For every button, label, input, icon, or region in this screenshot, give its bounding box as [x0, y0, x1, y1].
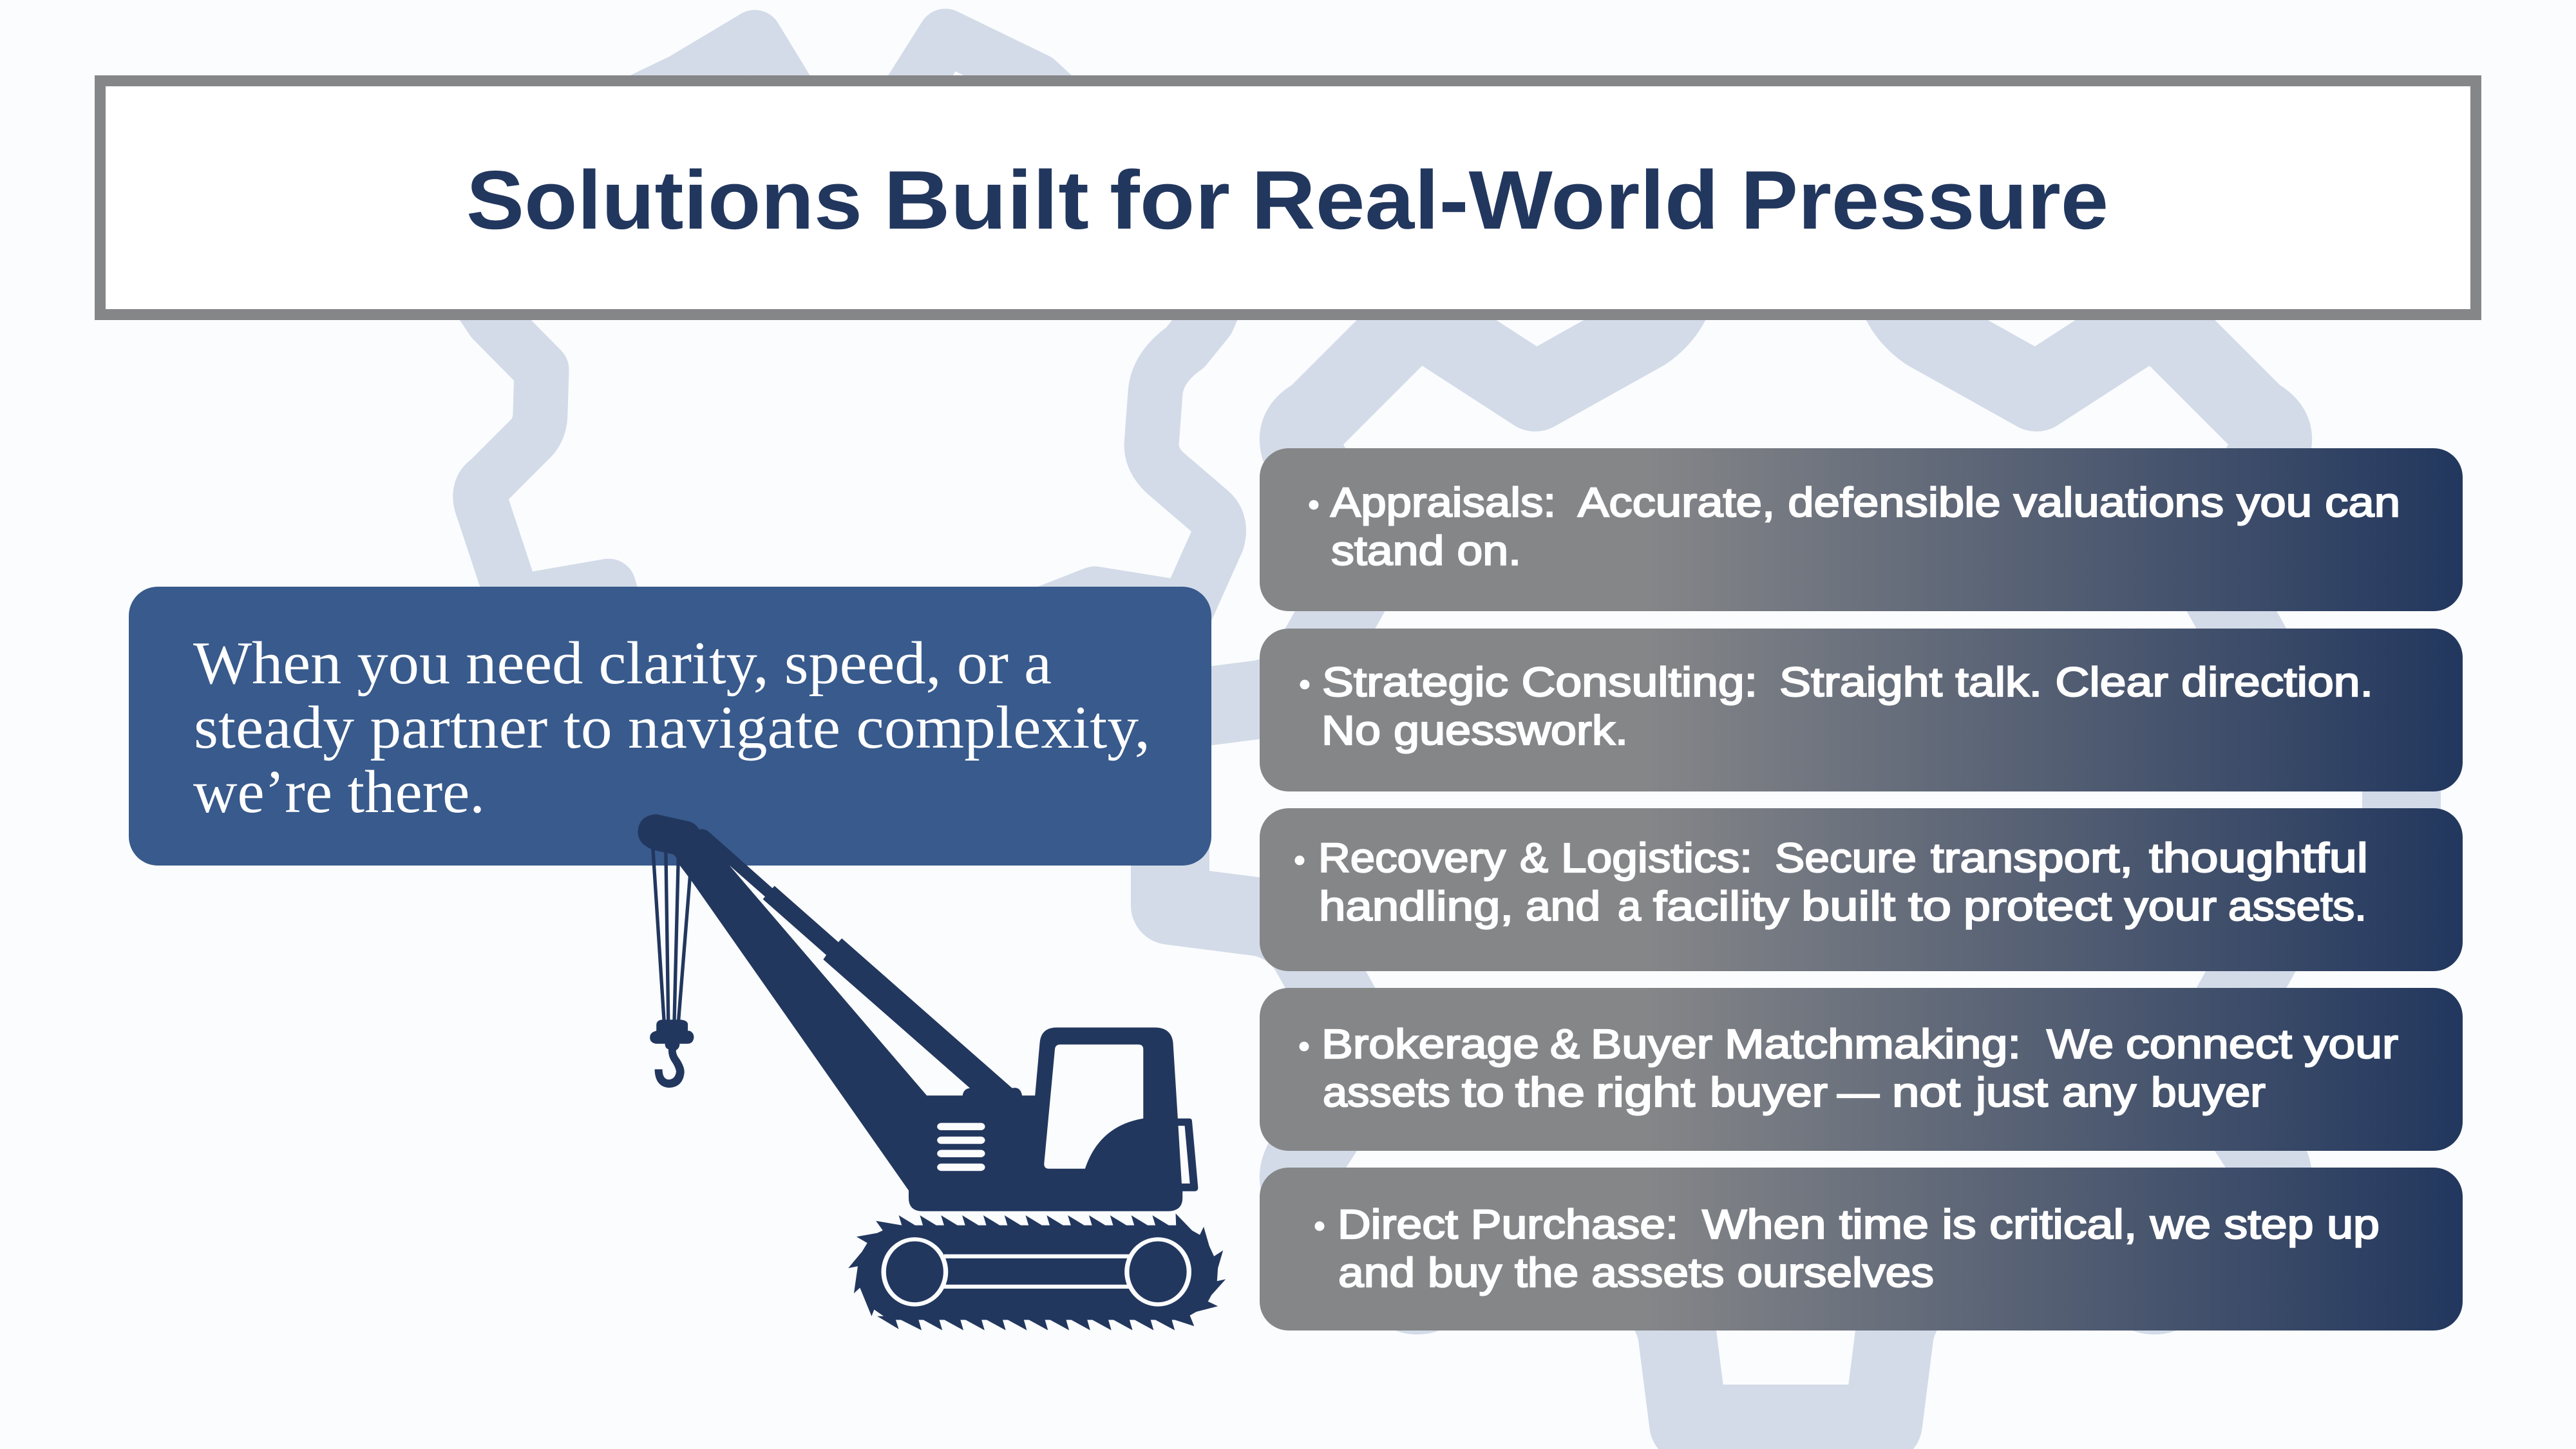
card text: Appraisals: — [1331, 479, 1556, 526]
card text: Strategic Consulting: — [1322, 659, 1757, 705]
card text: buyer — [1710, 1069, 1828, 1115]
bullet — [1300, 680, 1310, 689]
card: appraisals — [1260, 448, 2463, 611]
background gear: small — [451, 36, 1224, 773]
card text: Brokerage — [1321, 1021, 1539, 1067]
card text: Accurate, defensible valuations you can — [1578, 479, 2400, 526]
card text: — — [1837, 1069, 1879, 1115]
card text: We — [2047, 1021, 2114, 1067]
crane hook — [650, 1019, 694, 1088]
title: for — [1110, 154, 1230, 247]
card: strategic consulting — [1260, 629, 2463, 791]
intro text: we’re there. — [193, 759, 485, 826]
card text — [1318, 835, 2368, 929]
card text: When time is critical, we step up — [1702, 1201, 2380, 1247]
card text: assets. — [2228, 883, 2367, 929]
title: Built — [884, 154, 1089, 247]
card text: & — [1550, 1021, 1580, 1067]
card text — [1321, 1021, 2398, 1115]
crane cables — [653, 849, 690, 1030]
card text: Recovery — [1318, 835, 1506, 881]
card text: and — [1526, 883, 1600, 929]
bullet — [1309, 500, 1319, 510]
title: Solutions — [466, 154, 862, 247]
crane boom and cab — [638, 814, 1198, 1211]
card text: Straight talk. Clear direction. — [1779, 659, 2373, 705]
card text: protect — [1964, 883, 2112, 929]
card text: a — [1618, 883, 1641, 929]
card text: just — [1975, 1069, 2048, 1115]
title banner — [100, 81, 2476, 314]
card text: Logistics: — [1561, 835, 1752, 881]
card text — [1321, 659, 2373, 753]
card text: facility — [1653, 883, 1789, 929]
intro text — [193, 630, 1150, 826]
card text: Direct Purchase: — [1338, 1201, 1678, 1247]
engine vents — [937, 1123, 985, 1171]
title — [466, 154, 2108, 247]
intro text: When you need clarity, speed, or a — [193, 630, 1052, 697]
bullet — [1300, 1042, 1309, 1051]
card text: assets — [1323, 1069, 1450, 1115]
card text: buyer — [2151, 1069, 2266, 1115]
card text: & — [1520, 835, 1548, 881]
cab window — [1044, 1045, 1143, 1169]
card text: to — [1908, 883, 1951, 929]
card text: No guesswork. — [1321, 707, 1628, 753]
card text — [1331, 479, 2400, 574]
card text: to — [1462, 1069, 1504, 1115]
card text: Buyer — [1591, 1021, 1712, 1067]
track wheels and rails — [884, 1239, 1189, 1304]
card text: handling, — [1319, 883, 1513, 929]
card text: stand on. — [1331, 527, 1521, 574]
card text — [1338, 1201, 2380, 1296]
card text: the — [1515, 1069, 1585, 1115]
icon: crawler crane — [638, 814, 1226, 1331]
card text: and buy the assets ourselves — [1338, 1249, 1934, 1296]
card text: transport, — [1931, 835, 2133, 881]
panel: intro statement — [129, 587, 1211, 866]
card text: any — [2062, 1069, 2136, 1115]
card text: right — [1596, 1069, 1695, 1115]
card text: connect — [2126, 1021, 2292, 1067]
rear slot — [1179, 1126, 1190, 1184]
intro text: steady partner to navigate complexity, — [194, 694, 1150, 761]
card text: your — [2125, 883, 2217, 929]
boom gap — [729, 866, 970, 1095]
card text: thoughtful — [2149, 835, 2368, 881]
background gear: large — [1170, 193, 2401, 1424]
card text: Secure — [1775, 835, 1917, 881]
card text: built — [1801, 883, 1895, 929]
card text: not — [1892, 1069, 1960, 1115]
card text: Matchmaking: — [1725, 1021, 2021, 1067]
card text: your — [2304, 1021, 2398, 1067]
card: direct purchase — [1260, 1168, 2463, 1331]
crawler track — [848, 1213, 1226, 1331]
title: Real-World — [1251, 154, 1719, 247]
card: recovery and logistics — [1260, 808, 2463, 971]
bullet — [1315, 1221, 1324, 1231]
card: brokerage — [1260, 988, 2463, 1151]
title: Pressure — [1741, 154, 2108, 247]
bullet — [1294, 855, 1305, 866]
